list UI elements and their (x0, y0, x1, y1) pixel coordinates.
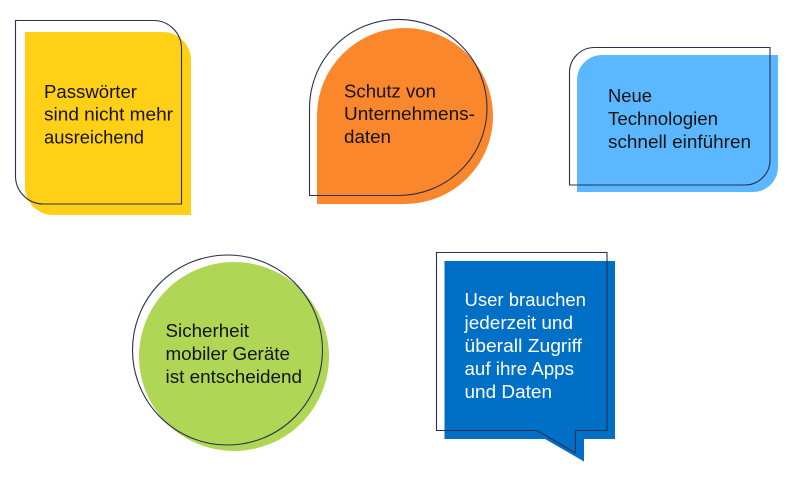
text block: Neue (608, 86, 652, 106)
blue speech bubble (444, 261, 615, 462)
green circle (139, 262, 329, 451)
panel: Neue Technologien (light blue) (570, 48, 778, 192)
text block: ist entscheidend (166, 367, 302, 387)
text block (608, 86, 751, 152)
text block: auf ihre Apps (464, 359, 574, 379)
text block: mobiler Geräte (166, 344, 290, 364)
text block: Unternehmens- (344, 104, 475, 124)
text block: ausreichend (44, 128, 144, 148)
text block: User brauchen (464, 290, 586, 310)
text block: daten (344, 127, 391, 147)
text block: Schutz von (344, 82, 436, 102)
yellow shape (25, 32, 191, 215)
panel: User brauchen Zugriff (dark blue speech bubble) (436, 252, 615, 462)
text block: Technologien (608, 109, 718, 129)
text block: Passwörter (44, 82, 137, 102)
outline (436, 252, 607, 453)
panel: Passwörter (yellow) (16, 20, 191, 215)
orange teardrop (317, 28, 493, 204)
text block: schnell einführen (608, 132, 751, 152)
text block: und Daten (464, 382, 552, 402)
text block (44, 82, 173, 148)
outline (570, 48, 770, 185)
outline (16, 20, 182, 204)
panel: Sicherheit mobiler Geräte (green) (132, 255, 329, 451)
outline (310, 19, 487, 196)
text block (166, 321, 302, 387)
text block (463, 290, 586, 402)
outline (132, 255, 322, 445)
blue shape (577, 55, 778, 192)
panel: Schutz von Unternehmensdaten (orange) (310, 19, 493, 204)
text block: überall Zugriff (464, 336, 583, 356)
text block (344, 82, 475, 147)
text block: jederzeit und (463, 313, 573, 333)
text block: sind nicht mehr (44, 104, 173, 124)
text block: Sicherheit (166, 321, 249, 341)
